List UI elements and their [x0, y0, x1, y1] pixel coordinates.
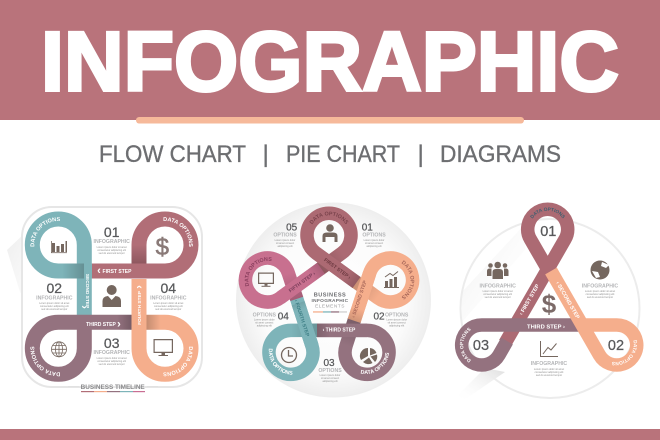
icon: globe — [590, 260, 610, 280]
ribbon labels — [460, 208, 637, 366]
long strand: second step — [342, 273, 382, 321]
block right: INFOGRAPHIC — [582, 284, 618, 290]
ribbon labels: DATA OPTIONS — [30, 217, 60, 246]
block 03: OPTIONS — [318, 368, 342, 374]
number 01: 01 — [540, 224, 556, 240]
block 04: INFOGRAPHIC — [150, 296, 187, 302]
block 04: Lorem ipsum dolor sit amet — [153, 302, 184, 305]
panel: business timeline — [7, 206, 203, 392]
ribbon labels: ‹ — [97, 265, 101, 277]
block bottom: sed do eiusmod tempor — [536, 374, 562, 377]
block 02 — [36, 280, 73, 311]
ribbon labels: FIRST STEP › — [322, 257, 352, 281]
block 05: OPTIONS — [273, 232, 297, 238]
ribbon labels: DATA OPTIONS — [402, 260, 414, 300]
block 01 — [362, 222, 386, 248]
ribbon: teal — [32, 219, 92, 317]
block 05: Lorem ipsum dolor — [275, 239, 296, 242]
block 02: OPTIONS — [385, 312, 409, 318]
icon: globe — [52, 342, 66, 357]
ribbon labels: DATA OPTIONS — [30, 346, 60, 376]
timeline caption: BUSINESS TIMELINE — [81, 384, 145, 391]
block 01: 01 — [104, 224, 120, 240]
ribbon labels: DATA OPTIONS — [530, 208, 565, 218]
icon: monitor — [154, 339, 173, 356]
icon: growth chart — [384, 272, 399, 288]
block bottom — [531, 361, 567, 377]
block 04 — [253, 312, 289, 328]
ribbon: peach — [139, 279, 191, 374]
subtitle: | — [418, 141, 424, 168]
icon: bar chart — [51, 241, 67, 253]
subtitle: DIAGRAMS — [440, 141, 561, 168]
icon: line chart — [540, 341, 558, 356]
icon: clock — [282, 348, 296, 362]
block 04 — [150, 280, 187, 311]
ribbon labels: ‹ FIRST STEP — [519, 283, 541, 316]
block 01: Lorem ipsum dolor sit amet — [97, 246, 127, 249]
icon: monitor — [258, 272, 274, 287]
ribbon labels: › — [117, 318, 121, 330]
ribbon labels: DATA OPTIONS — [460, 328, 471, 363]
block 03 — [318, 358, 342, 383]
ribbon labels: ‹ SECOND STEP — [351, 279, 369, 319]
ribbon labels: FIRST STEP — [103, 269, 132, 275]
icon: pie chart — [360, 348, 377, 364]
panel: triangle infographic — [454, 202, 644, 399]
block 02: sed do eiusmod tempor — [41, 308, 68, 311]
block 03: adipiscing elit — [322, 380, 338, 383]
block 04: adipiscing elit — [257, 324, 272, 328]
ribbon labels: ‹ FOURTH STEP — [293, 299, 310, 338]
icon: dollar: $ — [156, 234, 169, 261]
block left: INFOGRAPHIC — [480, 284, 516, 290]
block 02: consectetur adipiscing elit — [40, 305, 69, 308]
centre heading: INFOGRAPHIC — [312, 298, 349, 304]
ribbon labels: ‹ THIRD STEP — [323, 328, 356, 334]
block 02: Lorem ipsum dolor sit amet — [39, 302, 70, 305]
block 04: Lorem ipsum dolor — [254, 318, 275, 322]
ribbon: pink loop — [240, 247, 321, 316]
block 04: sit amet consect — [255, 322, 274, 324]
block 04: OPTIONS — [253, 312, 277, 318]
block 02 — [373, 312, 409, 328]
block 01: sit amet consect — [365, 242, 383, 245]
block 01: sed do eiusmod tempor — [99, 252, 125, 255]
block 03: consectetur adipiscing elit — [97, 360, 126, 363]
block bottom: Lorem ipsum dolor sit amet — [534, 368, 564, 371]
block left — [480, 284, 516, 299]
ribbon: peach loop — [551, 271, 637, 365]
block right: consectetur adipiscing elit — [586, 293, 615, 296]
ribbon labels — [244, 212, 414, 375]
block 05: sit amet consect — [276, 242, 294, 245]
icon: person — [322, 224, 338, 242]
ribbon labels: FOURTH STEP — [137, 290, 143, 325]
number 02: 02 — [608, 338, 624, 354]
ribbon labels: DATA OPTIONS — [360, 352, 389, 374]
ribbon labels: ‹ — [133, 285, 145, 289]
block bottom: INFOGRAPHIC — [531, 361, 567, 367]
block 03: sit amet consect — [321, 377, 339, 380]
subtitle: PIE CHART — [286, 141, 400, 168]
footer band — [0, 429, 660, 440]
block 01: INFOGRAPHIC — [94, 239, 130, 245]
block 01: Lorem ipsum dolor — [364, 239, 385, 242]
block right: Lorem ipsum dolor sit amet — [585, 290, 615, 293]
block 02: 02 — [373, 312, 385, 322]
ribbon labels: DATA OPTIONS — [163, 346, 193, 376]
number 03: 03 — [473, 338, 489, 354]
block 02: Lorem ipsum dolor — [386, 318, 407, 322]
ribbon: purple loop — [462, 325, 580, 365]
subtitle: FLOW CHART — [99, 141, 246, 168]
ribbon: red loop — [307, 213, 356, 282]
subtitle — [99, 141, 561, 168]
subtitle: | — [262, 141, 269, 168]
centre heading — [312, 292, 349, 313]
block 02: INFOGRAPHIC — [36, 296, 73, 302]
block 01: 01 — [362, 222, 373, 234]
block 01: OPTIONS — [362, 232, 386, 238]
block 01 — [94, 224, 130, 255]
block left: sed do eiusmod tempor — [485, 296, 511, 299]
long shadow — [462, 224, 525, 322]
ribbon: peach loop — [339, 252, 420, 321]
ribbon: red — [92, 219, 191, 271]
icon: person — [102, 285, 121, 307]
ribbon labels: ‹ — [78, 305, 90, 309]
block 05: 05 — [286, 222, 298, 234]
ribbon labels: ‹ SECOND STEP — [554, 281, 581, 320]
block 01: consectetur adipiscing elit — [97, 249, 126, 252]
block left: consectetur adipiscing elit — [483, 293, 512, 296]
ribbon: purple — [32, 322, 132, 374]
panel: business infographic elements — [236, 202, 431, 398]
block 02: adipiscing elit — [389, 324, 405, 328]
block 04: 04 — [278, 312, 289, 322]
block 01: adipiscing elit — [366, 245, 382, 248]
lower shadow — [455, 368, 505, 400]
rounded square frame — [22, 207, 202, 387]
ribbon labels: DATA OPTIONS — [310, 212, 348, 224]
block left: Lorem ipsum dolor sit amet — [483, 290, 513, 293]
block right: sed do eiusmod tempor — [587, 296, 613, 299]
block 04: 04 — [161, 280, 176, 296]
header banner — [0, 0, 660, 120]
block 03: INFOGRAPHIC — [94, 350, 130, 356]
block 02: 02 — [47, 280, 62, 296]
centre heading: ELEMENTS — [315, 304, 345, 310]
block right — [582, 284, 618, 299]
centre heading: BUSINESS — [314, 292, 346, 298]
block 02: sit amet consect — [388, 322, 406, 324]
ribbon labels: DATA OPTIONS — [612, 340, 637, 366]
block 04: sed do eiusmod tempor — [155, 308, 182, 311]
circle outline — [460, 219, 640, 398]
title: INFOGRAPHIC — [41, 14, 619, 108]
ribbon labels: DATA OPTIONS — [244, 257, 272, 286]
block bottom: consectetur adipiscing elit — [535, 371, 564, 374]
ribbon labels — [30, 217, 193, 376]
icon: dollar: $ — [542, 289, 557, 319]
ribbon: teal loop — [256, 298, 337, 383]
ribbon: purple loop — [317, 301, 398, 386]
ribbon labels: SECOND STEP — [84, 274, 90, 309]
long strand: third step — [317, 307, 367, 354]
ribbon labels: THIRD STEP — [86, 322, 117, 328]
ribbon labels: DATA OPTIONS — [164, 217, 193, 247]
block 05 — [273, 222, 298, 248]
long shadow — [7, 232, 60, 345]
ribbon: red loop — [505, 209, 568, 343]
block 03: Lorem ipsum dolor sit amet — [97, 357, 127, 360]
long strand: first step — [316, 253, 356, 282]
ribbon labels: THIRD STEP › — [527, 325, 565, 331]
ribbon labels: FIFTH STEP › — [288, 271, 317, 294]
block 05: adipiscing elit — [277, 245, 293, 248]
block 03 — [94, 335, 130, 366]
icon: people — [487, 262, 508, 279]
block 03: Lorem ipsum dolor — [320, 374, 341, 377]
long strand: fourth step — [283, 303, 327, 346]
timeline caption — [68, 384, 158, 392]
crease shadows — [62, 245, 160, 330]
ribbon labels: DATA OPTIONS — [268, 348, 292, 375]
long strand: fifth step — [280, 259, 321, 307]
accent bar — [136, 117, 524, 124]
block 04: consectetur adipiscing elit — [154, 305, 183, 308]
block 03: sed do eiusmod tempor — [99, 363, 125, 366]
block 03: 03 — [323, 358, 335, 369]
block 03: 03 — [104, 335, 120, 351]
background disc — [236, 202, 431, 398]
